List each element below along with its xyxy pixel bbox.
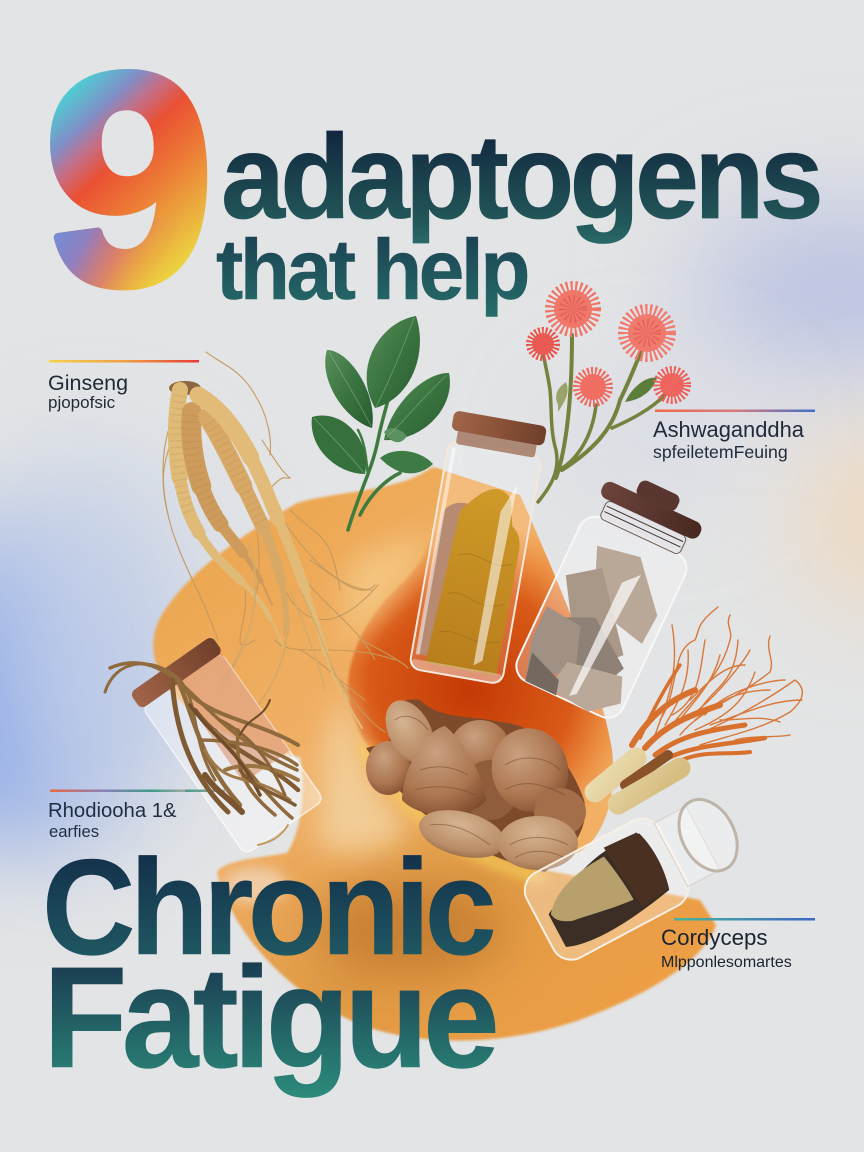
- leaf top big: [367, 316, 420, 408]
- label: rhodiola: earfies: [49, 822, 99, 841]
- neck: [599, 500, 687, 555]
- root tail strands: [218, 545, 350, 700]
- organ front body: [153, 467, 716, 1041]
- turmeric jar: [409, 410, 547, 685]
- flower 3: [532, 333, 554, 355]
- glass body: [409, 440, 542, 685]
- organ upper sheen: [340, 530, 430, 650]
- base rim: [410, 659, 502, 683]
- label: cordyceps: [661, 925, 792, 971]
- dark root contents: [535, 830, 677, 953]
- wooden lid: [451, 410, 547, 446]
- label: rhodiola: Rhodiooha 1&: [48, 800, 177, 822]
- taproot 3: [207, 417, 286, 705]
- plant stems: [538, 335, 665, 502]
- jar neck: [456, 428, 537, 458]
- cordyceps: [595, 607, 802, 804]
- flower 2: [628, 314, 666, 352]
- label: ginseng: [48, 371, 128, 412]
- organ darker belly: [315, 885, 505, 975]
- mushroom backing: [366, 699, 585, 872]
- open glass jar: [518, 781, 754, 967]
- leaf lower left: [312, 415, 366, 474]
- jar mouth: [667, 789, 749, 881]
- dark lid: [599, 479, 704, 541]
- leaf small right: [380, 451, 433, 473]
- taproot 2: [191, 412, 272, 605]
- title numeral 9: 9: [44, 11, 214, 347]
- orange fingers: [632, 665, 765, 760]
- green leaf sprig: [312, 316, 450, 530]
- tangled roots: [105, 663, 298, 845]
- lid knob: [634, 478, 682, 513]
- powder texture: [436, 551, 514, 645]
- label rule: ginseng: [49, 360, 199, 362]
- jar body: [518, 812, 695, 967]
- heading: fatigue: Fatigue: [43, 937, 496, 1098]
- title numeral 9: 9: [44, 11, 214, 347]
- label rule: rhodiola overlay: [50, 790, 185, 792]
- jar neck: [654, 806, 720, 887]
- glass highlight: [474, 482, 518, 667]
- pale stem 2: [618, 768, 680, 804]
- glass left highlight: [416, 447, 456, 655]
- label: cordyceps: Mlpponlesomartes: [661, 954, 792, 971]
- jar glass body: [142, 652, 324, 855]
- heading: adaptogens: adaptogens: [221, 110, 819, 244]
- pale root contents: [539, 854, 634, 937]
- label: rhodiola: [48, 800, 177, 841]
- brown bark: [604, 828, 674, 909]
- rhodiola rule behind roots: [50, 790, 225, 792]
- fine rootlets: [163, 352, 408, 732]
- label: ginseng: Ginseng: [48, 371, 128, 395]
- title numeral 9: [50, 69, 208, 290]
- ashwagandha plant: [532, 290, 684, 502]
- flower 5: [660, 373, 684, 397]
- organ rim glow: [362, 745, 545, 878]
- golden powder: [425, 482, 529, 676]
- label rule: cordyceps: [674, 918, 815, 920]
- ginseng root: [163, 352, 408, 732]
- taproot 4: [198, 395, 362, 728]
- pale powder layer: [416, 499, 485, 665]
- stones: [514, 530, 680, 723]
- root crown: [169, 381, 201, 395]
- leaf right: [384, 373, 450, 440]
- organ rear lobe: [300, 468, 613, 900]
- label: ashwagandha: Ashwaganddha: [653, 417, 805, 442]
- label: ashwagandha: spfeiletemFeuing: [653, 442, 788, 462]
- flower 4: [580, 374, 606, 400]
- plant leaf small: [556, 382, 568, 412]
- taproot 1: [176, 390, 285, 650]
- leaf top left: [325, 350, 373, 428]
- label rule: ashwagandha: [655, 410, 815, 412]
- organ lower left lobe: [223, 867, 287, 903]
- sprig stems: [348, 400, 400, 530]
- label: cordyceps: Cordyceps: [661, 925, 768, 950]
- plant leaf: [625, 378, 657, 402]
- thin orange filaments: [655, 607, 802, 745]
- root bands: [176, 395, 262, 530]
- glass body: [511, 511, 692, 723]
- jar lid: [130, 636, 223, 709]
- organ neck highlight: [315, 690, 410, 855]
- heading: that help: that help: [216, 223, 528, 318]
- label: ashwagandha: [653, 417, 805, 462]
- heading: chronic: Chronic: [42, 831, 493, 983]
- pale stem: [595, 758, 636, 792]
- label: ginseng: pjopofsic: [48, 393, 116, 412]
- leaf midribs: [314, 318, 447, 473]
- glass highlight: [569, 569, 641, 702]
- dark stem: [625, 755, 668, 785]
- mushroom cluster: [366, 692, 586, 872]
- rhodiola jar with roots: [50, 636, 326, 856]
- flower 1: [554, 290, 592, 328]
- stone jar: [510, 463, 714, 724]
- jar tint: [175, 652, 290, 783]
- mushroom folds: [395, 716, 568, 858]
- stomach organ: [153, 467, 716, 1041]
- leaf small mid: [384, 428, 407, 442]
